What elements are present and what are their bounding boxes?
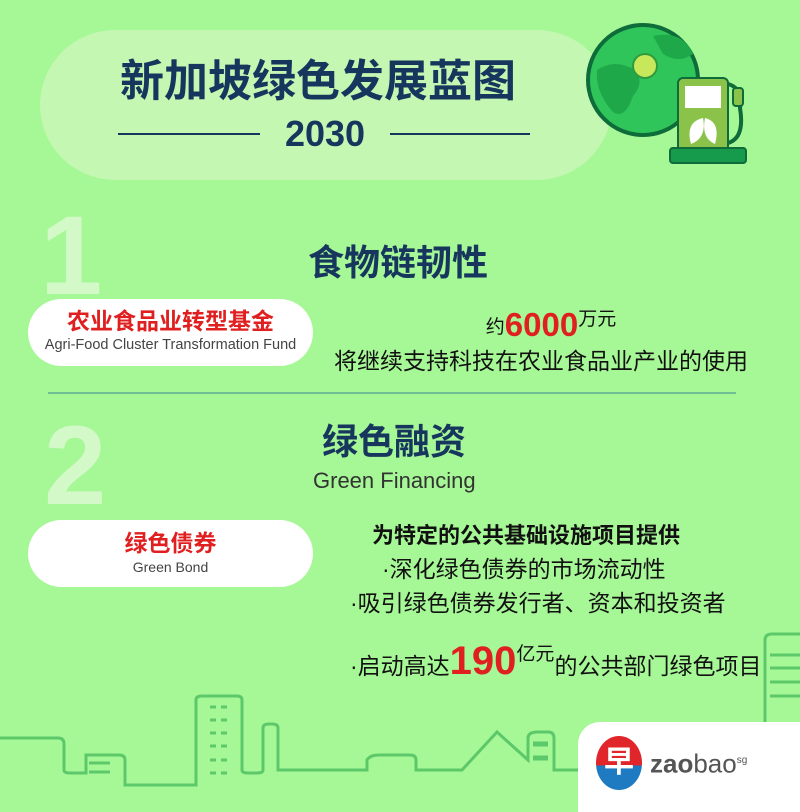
number 2: 2 (44, 403, 106, 528)
text block: green bond details: ·吸引绿色债券发行者、资本和投资者 (350, 590, 726, 616)
text block: green bond details: 为特定的公共基础设施项目提供 (372, 523, 680, 548)
logo: zaobao (578, 722, 800, 812)
logo text: zaobaosg (650, 749, 747, 779)
icon: globe and fuel pump (586, 23, 747, 164)
number 1: 1 (40, 193, 102, 318)
pill: agri-food fund (28, 299, 313, 366)
subheading: Green Financing (313, 468, 476, 493)
header pill (40, 30, 612, 180)
pill: agri-food fund: 农业食品业转型基金 (67, 308, 274, 334)
icon: zao character (596, 736, 642, 790)
icon: zao character: 早 (604, 746, 634, 779)
heading 1: 食物链韧性 (308, 242, 488, 283)
pill: green bond (28, 520, 313, 587)
text block: green bond details: ·深化绿色债券的市场流动性 (382, 556, 666, 582)
pill: green bond: 绿色债券 (124, 530, 216, 556)
skyline (0, 632, 800, 786)
text block: green bond details (350, 523, 761, 683)
text: 6000: 约6000万元 (486, 306, 616, 343)
text block: green bond details: ·启动高达190亿元的公共部门绿色项目 (350, 639, 761, 683)
pill: green bond: Green Bond (133, 559, 208, 575)
text: 6000 (334, 306, 748, 374)
divider (48, 392, 736, 394)
heading 2: 绿色融资 (322, 421, 466, 462)
text: 6000: 将继续支持科技在农业食品业产业的使用 (334, 348, 748, 374)
title: 新加坡绿色发展蓝图 (120, 57, 516, 106)
pill: agri-food fund: Agri-Food Cluster Transformation Fund (45, 337, 296, 353)
year with lines: 2030 (285, 113, 365, 154)
